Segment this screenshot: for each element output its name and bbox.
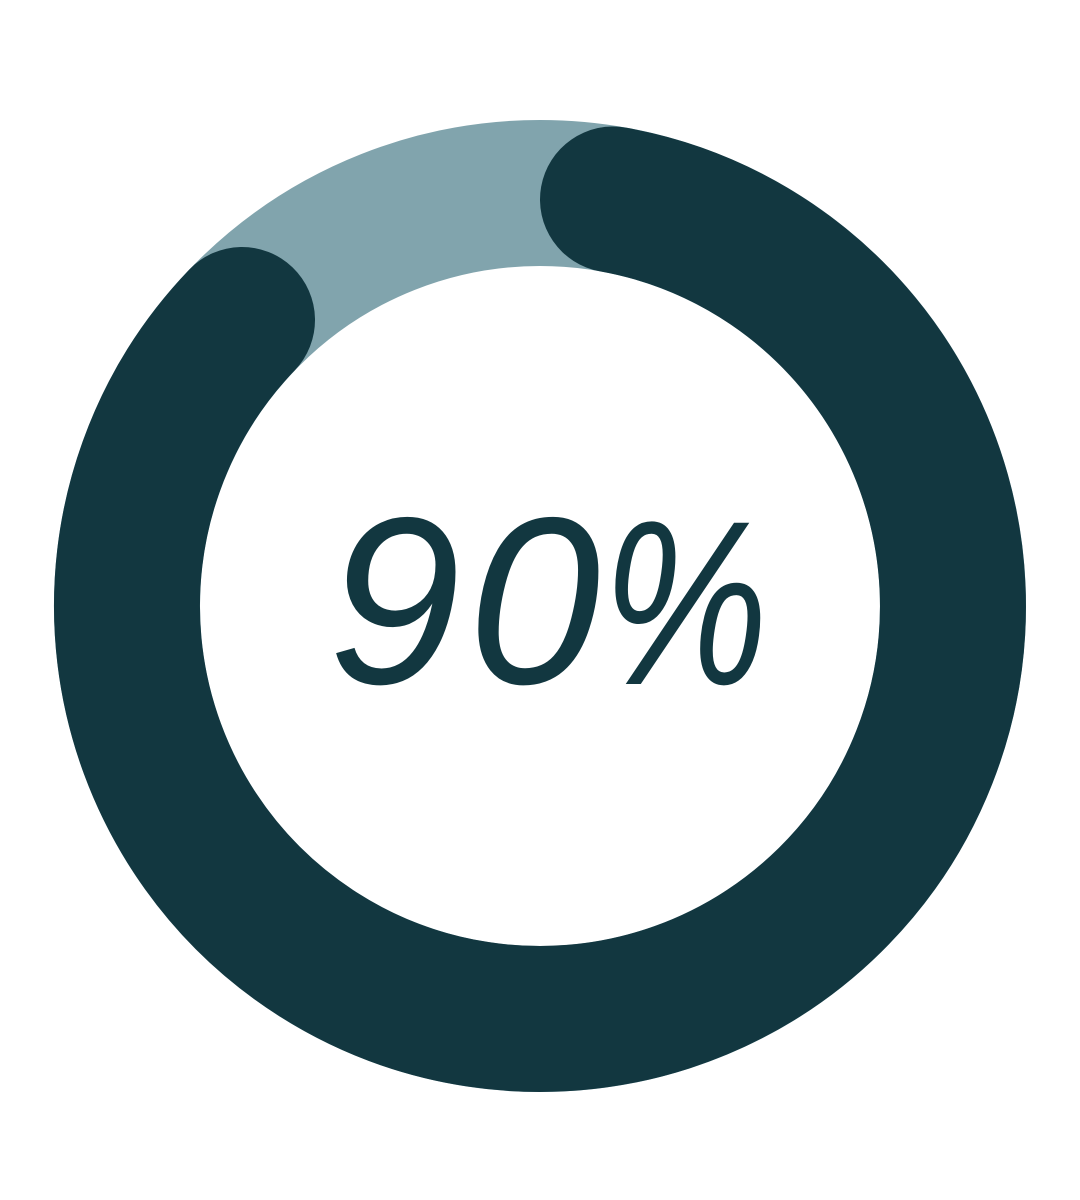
ring progress arc (127, 200, 953, 1019)
percentage value: % (602, 472, 768, 734)
percentage value: 0 (468, 469, 600, 734)
percentage value (328, 469, 768, 734)
percentage value: 9 (328, 469, 460, 734)
ring track (127, 193, 953, 1019)
